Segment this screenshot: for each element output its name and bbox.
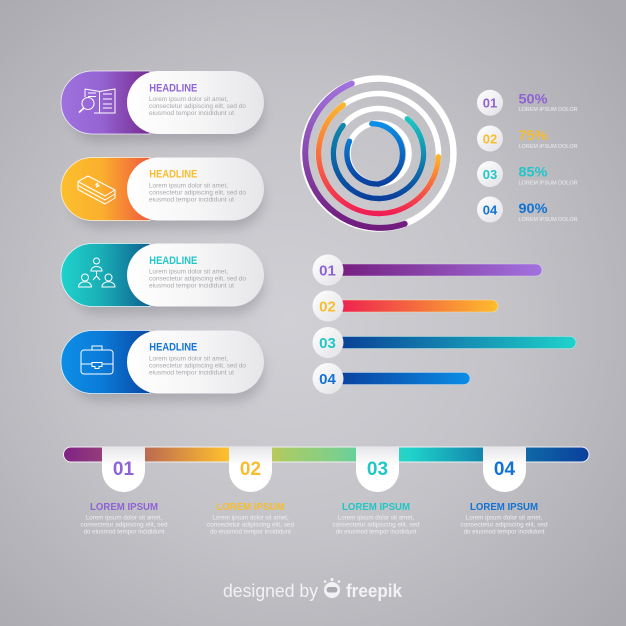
bar 04: 04 [319,371,336,388]
text block [149,96,247,117]
icon: book with magnifier [79,89,115,113]
legend: radial chart percentages [477,90,578,223]
timeline step 01: 01 [113,459,134,480]
timeline bar [64,447,589,462]
footer credit: freepik [346,581,403,601]
chart: concentric radial progress rings [304,78,454,228]
bar 04 [312,363,470,394]
text block: consectetur adipiscing elit, sed do [149,103,247,110]
panel: headline pill 2 [61,158,264,228]
legend item 04: LOREM IPSUM DOLOR [518,217,578,223]
heading: HEADLINE [149,255,197,267]
bar 02: 02 [319,298,336,316]
timeline step 02: 02 [240,459,261,480]
timeline step 04: consectetur adipiscing elit, sed [460,522,548,528]
text block: Lorem ipsum dolor sit amet, [149,356,228,362]
legend item 04: 04 [483,202,498,217]
timeline step 01 [80,447,168,536]
heading: HEADLINE [149,82,197,94]
timeline step 02: do eiusmod tempor incididunt [210,528,291,536]
text block: eiusmod tempor incididunt ut [149,370,234,376]
text block: eiusmod tempor incididunt ut [149,110,234,117]
timeline step 01: do eiusmod tempor incididunt [84,528,165,536]
legend item 01 [477,90,578,116]
icon: banknote stack [78,176,115,204]
bar 02 [312,290,498,322]
timeline step 01: consectetur adipiscing elit, sed [80,522,168,528]
legend item 03: 85% [518,164,548,180]
text block: eiusmod tempor incididunt ut [149,196,234,204]
text block [149,268,247,290]
panel: headline pill 4 [61,330,264,402]
chart: horizontal bars [312,254,576,394]
bar 03 [312,327,576,358]
timeline step 03: do eiusmod tempor incididunt [336,528,417,536]
text block: consectetur adipiscing elit, sed do [149,190,247,196]
heading: HEADLINE [149,342,197,354]
footer credit [223,578,403,601]
icon: freepik mascot [324,578,340,598]
text block: Lorem ipsum dolor sit amet, [149,268,228,276]
timeline step 02: LOREM IPSUM [216,501,285,513]
timeline step 03: LOREM IPSUM [342,501,410,513]
icon: briefcase [81,346,113,374]
legend item 01: 50% [518,90,548,106]
legend item 03: LOREM IPSUM DOLOR [518,180,578,186]
text block: Lorem ipsum dolor sit amet, [149,182,228,190]
legend item 04 [477,196,578,223]
legend item 03: 03 [483,167,497,182]
timeline step 04: 04 [494,459,515,480]
timeline step 03 [332,447,420,536]
legend item 02: 02 [483,131,497,146]
timeline step 02: consectetur adipiscing elit, sed [207,522,295,528]
timeline step 04: Lorem ipsum dolor sit amet, [466,514,542,522]
text block: Lorem ipsum dolor sit amet, [149,96,228,103]
footer credit: designed by [223,581,318,601]
text block: consectetur adipiscing elit, sed do [149,362,247,370]
panel: headline pill 1 [61,71,264,142]
legend item 01: 01 [483,96,497,110]
text block [149,182,247,204]
legend item 02: 75% [518,127,548,143]
timeline step 01: LOREM IPSUM [90,501,158,513]
timeline step 01: Lorem ipsum dolor sit amet, [86,514,162,522]
bar 01: 01 [319,262,336,280]
timeline step 04: LOREM IPSUM [470,501,538,513]
timeline step 04 [460,447,548,536]
text block [149,356,247,376]
timeline step 02 [207,447,295,536]
legend item 02 [477,126,578,152]
panel: headline pill 3 [61,244,264,314]
timeline step 03: 03 [367,459,388,480]
timeline step 04: do eiusmod tempor incididunt [464,528,545,536]
text block: consectetur adipiscing elit, sed do [149,276,247,282]
icon: people network [78,258,115,287]
legend item 04: 90% [518,200,548,216]
timeline step 03: consectetur adipiscing elit, sed [332,522,420,528]
timeline step 02: Lorem ipsum dolor sit amet, [212,514,289,522]
bar 01 [312,254,542,286]
legend item 01: LOREM IPSUM DOLOR [518,107,578,113]
bar 03: 03 [319,335,336,352]
legend item 03 [477,161,578,187]
timeline step 03: Lorem ipsum dolor sit amet, [338,514,414,522]
legend item 02: LOREM IPSUM DOLOR [518,144,578,150]
text block: eiusmod tempor incididunt ut [149,282,234,290]
heading: HEADLINE [149,168,197,180]
